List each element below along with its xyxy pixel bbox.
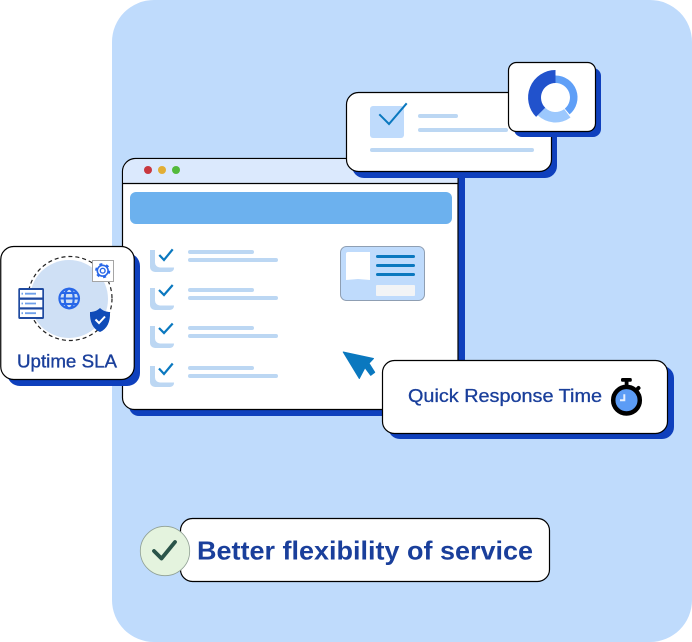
icon: green check circle (140, 526, 190, 576)
uptime SLA card (1, 246, 140, 386)
checklist row 3 (150, 324, 278, 348)
browser title bar (123, 159, 458, 184)
browser address bar (130, 192, 452, 224)
browser window (122, 158, 465, 416)
icon: globe (59, 289, 79, 308)
checklist row 4 (150, 364, 278, 387)
banner text: Better flexibility of service (197, 536, 533, 566)
checklist (150, 249, 278, 387)
label: Quick Response Time (408, 385, 602, 406)
checklist row 1 (150, 249, 278, 272)
donut chart (528, 70, 578, 123)
checklist row 2 (150, 285, 278, 310)
quick response time card (382, 360, 674, 439)
checkbox icon (370, 103, 407, 138)
dashed orbit circle (28, 256, 112, 340)
better flexibility banner (140, 518, 550, 582)
id card (340, 246, 424, 300)
cursor arrow (343, 352, 375, 378)
label: Uptime SLA (17, 350, 118, 372)
icon: shield (90, 308, 110, 332)
icon: gear box (92, 260, 114, 282)
icon: stopwatch (613, 378, 640, 414)
donut chart card (508, 62, 601, 137)
task card (346, 92, 557, 178)
icon: server (18, 288, 44, 319)
